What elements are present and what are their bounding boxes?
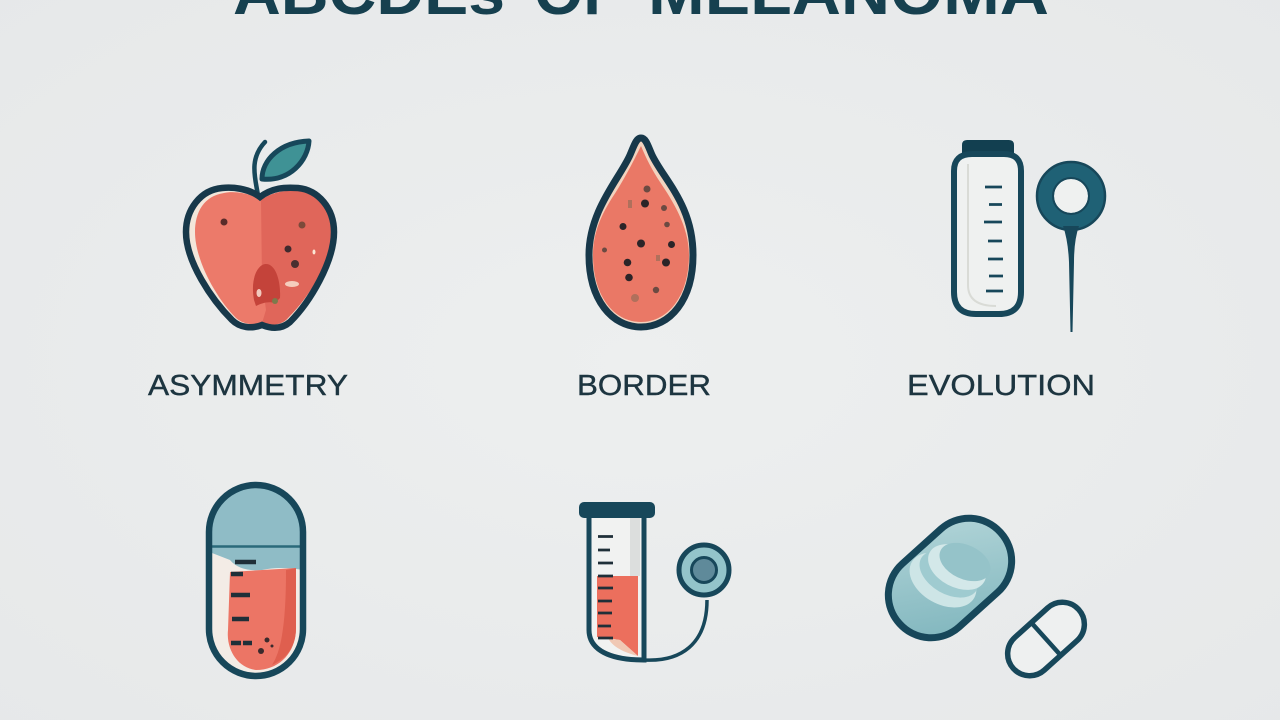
icon: capsule [209,485,303,676]
label: evolution: EVOLUTION [907,370,1095,402]
icon: apple [186,141,334,328]
icon: vial and magnifier [954,140,1105,332]
label: border: BORDER [577,370,711,402]
label: asymmetry: ASYMMETRY [148,370,348,402]
icon: mole with border [589,138,693,327]
icon: pills [884,514,1088,678]
icon: test tube with stethoscope [579,502,729,660]
title [233,0,1049,28]
